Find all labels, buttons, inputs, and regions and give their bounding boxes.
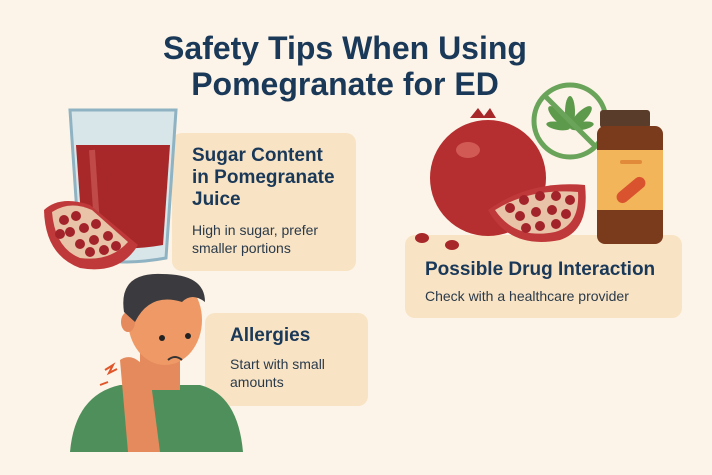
icon: no cannabis sign <box>534 85 606 157</box>
heading: sugar: Sugar Content <box>192 145 323 166</box>
heading: sugar <box>192 145 335 210</box>
text: sugar <box>192 222 318 256</box>
icon: man with neck pain <box>70 274 243 452</box>
text: drug: Check with a healthcare provider <box>425 288 629 304</box>
title <box>163 30 527 102</box>
heading: drug: Possible Drug Interaction <box>425 259 655 280</box>
icon: pomegranate slice right <box>415 184 586 250</box>
icon: whole pomegranate <box>430 108 546 236</box>
text: sugar: High in sugar, prefer <box>192 222 318 238</box>
panel: drug interaction <box>405 235 682 318</box>
icon: medicine bottle <box>597 110 663 244</box>
panel: allergies <box>205 313 368 406</box>
text: allergies <box>230 356 325 390</box>
heading: sugar: in Pomegranate <box>192 167 335 188</box>
text: allergies: amounts <box>230 374 284 390</box>
text: sugar: smaller portions <box>192 240 291 256</box>
icon: juice glass <box>70 110 176 262</box>
title: Pomegranate for ED <box>191 66 499 102</box>
icon: pomegranate slice left <box>44 201 138 269</box>
title: Safety Tips When Using <box>163 30 527 66</box>
panel: sugar content <box>172 133 356 271</box>
heading: allergies: Allergies <box>230 325 310 346</box>
heading: sugar: Juice <box>192 189 241 210</box>
text: allergies: Start with small <box>230 356 325 372</box>
